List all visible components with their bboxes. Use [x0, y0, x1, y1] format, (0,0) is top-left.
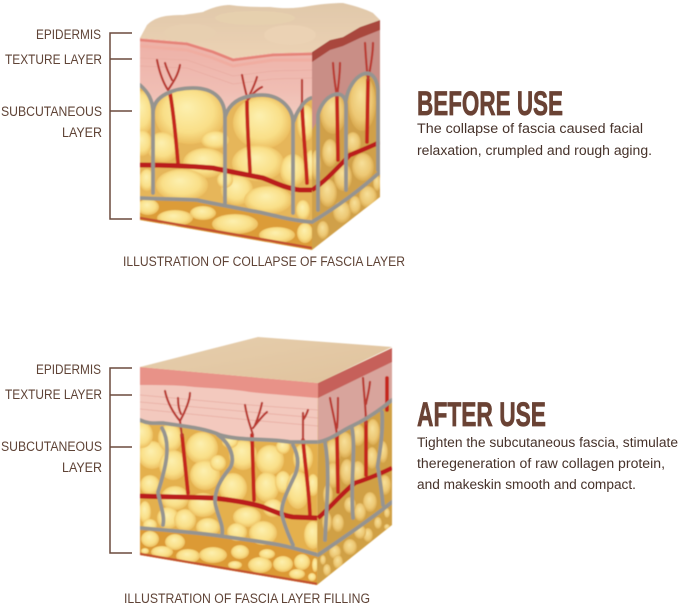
cube 1 side dermis	[312, 20, 380, 130]
labels: before use layers: SUBCUTANEOUS	[1, 104, 102, 119]
cube 2 side dermis	[318, 360, 392, 442]
labels: before use layers: EPIDERMIS	[36, 27, 101, 42]
text: after use description	[417, 435, 678, 492]
labels: after use layers: SUBCUTANEOUS	[1, 439, 102, 454]
cube 1 side grey arches	[312, 73, 380, 222]
label bracket: before	[110, 33, 132, 219]
cube 2 fat cells	[131, 422, 322, 549]
cube 1 front face	[139, 38, 313, 251]
cube 2 side fat cells	[320, 419, 391, 576]
cube 2 lower fat layer	[141, 531, 318, 581]
text: before use description: relaxation, crumpled and rough aging.	[417, 143, 652, 158]
text: after use description: Tighten the subcutaneous fascia, stimulate	[417, 435, 678, 450]
cube 2 blood vessels	[140, 391, 318, 518]
cube 1 dermis	[140, 38, 312, 123]
cube 1 blood vessels	[140, 60, 312, 190]
cube 1 side fat cells	[311, 75, 381, 239]
caption: collapse illustration: ILLUSTRATION OF COLLAPSE OF FASCIA LAYER	[123, 254, 405, 269]
labels: after use layers: LAYER	[62, 460, 102, 475]
cube 1 epidermis	[140, 3, 380, 58]
cube 1 side vessels	[312, 43, 380, 190]
cube 2 side pink band	[318, 348, 392, 398]
cube 1 side pink band	[312, 20, 380, 62]
heading: before use: BEFORE USE	[417, 85, 563, 123]
cube 1 fat cells	[140, 90, 312, 244]
cube 2 dermis	[139, 384, 318, 441]
cube 2 side fascia	[318, 400, 392, 555]
label bracket: after	[110, 368, 132, 553]
illustration: collapsed fascia skin cube	[128, 3, 382, 255]
text: before use description: The collapse of fascia caused facial	[417, 121, 643, 136]
text: before use description	[417, 121, 652, 158]
caption: filling illustration: ILLUSTRATION OF FASCIA LAYER FILLING	[124, 591, 370, 606]
text: after use description: theregeneration of raw collagen protein,	[417, 456, 665, 471]
cube 2 side face	[315, 345, 395, 590]
labels: after use layers	[1, 362, 102, 475]
text: after use description: and makeskin smooth and compact.	[417, 477, 636, 492]
cube 2 grey fascia	[140, 420, 318, 555]
cube 2 side vessels	[318, 378, 392, 518]
cube 2 pink band	[140, 367, 318, 398]
labels: after use layers: TEXTURE LAYER	[5, 387, 102, 402]
heading: after use: AFTER USE	[417, 396, 546, 434]
labels: before use layers: TEXTURE LAYER	[5, 52, 102, 67]
cube 1 grey fascia arches	[140, 85, 312, 222]
labels: after use layers: EPIDERMIS	[36, 362, 101, 377]
cube 2 front face	[131, 365, 322, 590]
labels: before use layers	[1, 27, 102, 140]
labels: before use layers: LAYER	[62, 125, 102, 140]
cube 1 pink band	[140, 40, 312, 60]
cube 1 side face	[310, 15, 382, 255]
cube 2 epidermis	[140, 337, 392, 383]
illustration: filled fascia skin cube	[131, 337, 395, 590]
